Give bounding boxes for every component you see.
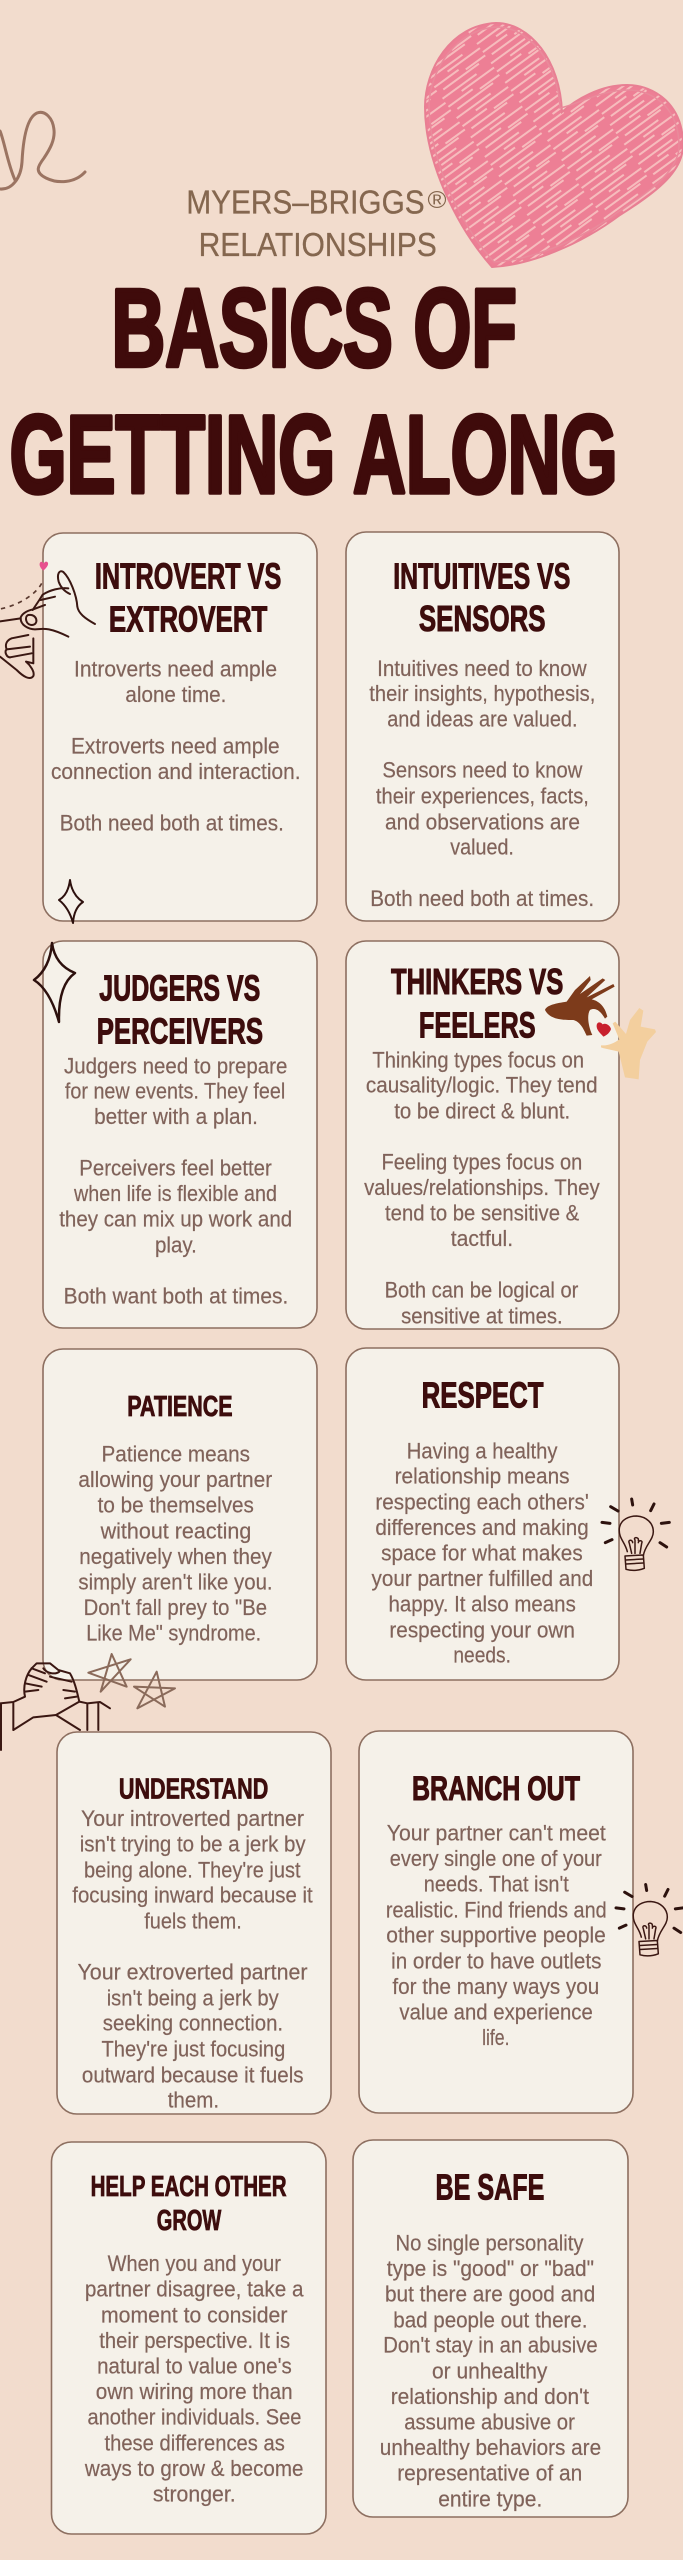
- heading: patience: PATIENCE: [127, 1391, 233, 1423]
- text: judgers vs perceivers body: they can mix up work and: [59, 1207, 292, 1232]
- text: help each other grow body: [84, 2251, 304, 2507]
- text: branch out body: [386, 1821, 607, 2050]
- text: patience body: [78, 1442, 273, 1646]
- text: thinkers vs feelers body: values/relationships. They: [364, 1175, 600, 1200]
- heading: thinkers vs feelers: [391, 961, 563, 1045]
- text: branch out body: in order to have outlets: [391, 1948, 602, 1973]
- text: intuitives vs sensors body: their insights, hypothesis,: [369, 681, 595, 706]
- text: be safe body: [380, 2231, 601, 2512]
- text: thinkers vs feelers body: Feeling types focus on: [382, 1149, 582, 1174]
- text: thinkers vs feelers body: to be direct & blunt.: [394, 1098, 570, 1123]
- text: judgers vs perceivers body: Perceivers feel better: [79, 1156, 272, 1181]
- icon: stars: [88, 1654, 175, 1708]
- text: thinkers vs feelers body: Both can be logical or: [385, 1277, 578, 1302]
- text: be safe body: entire type.: [438, 2487, 542, 2512]
- subtitle: [186, 183, 447, 263]
- text: understand body: being alone. They're just: [84, 1857, 300, 1882]
- text: intuitives vs sensors body: and observations are: [385, 809, 580, 834]
- text: help each other grow body: partner disagree, take a: [85, 2277, 304, 2302]
- subtitle: MYERS–BRIGGS: [186, 183, 425, 220]
- heading: introvert vs extrovert: [95, 555, 281, 640]
- text: respect body: happy. It also means: [388, 1592, 576, 1617]
- text: patience body: Patience means: [102, 1442, 250, 1467]
- text: be safe body: but there are good and: [385, 2282, 595, 2307]
- panel: understand: [57, 1732, 331, 2114]
- text: understand body: [72, 1806, 313, 2113]
- heading: intuitives vs sensors: SENSORS: [419, 598, 546, 639]
- text: introvert vs extrovert body: Both need both at times.: [60, 811, 284, 836]
- heading: help each other grow: GROW: [157, 2205, 222, 2237]
- text: judgers vs perceivers body: [59, 1053, 292, 1308]
- text: intuitives vs sensors body: Sensors need to know: [382, 758, 582, 783]
- icon: swirl line: [0, 112, 85, 189]
- icon: pinky promise hands: [0, 562, 95, 678]
- text: understand body: fuels them.: [144, 1908, 242, 1933]
- panel: patience: [43, 1349, 317, 1680]
- panel: thinkers vs feelers: [346, 941, 619, 1329]
- text: intuitives vs sensors body: [369, 656, 595, 911]
- text: respect body: Having a healthy: [407, 1438, 558, 1463]
- text: help each other grow body: natural to value one's: [97, 2354, 292, 2379]
- icon: lightbulb branch out: [616, 1884, 683, 1956]
- text: introvert vs extrovert body: Introverts need ample: [74, 657, 277, 682]
- text: help each other grow body: own wiring more than: [96, 2379, 293, 2404]
- text: be safe body: bad people out there.: [393, 2307, 588, 2332]
- text: judgers vs perceivers body: Judgers need to prepare: [64, 1053, 287, 1078]
- text: thinkers vs feelers body: Thinking types focus on: [372, 1047, 584, 1072]
- panel: intuitives vs sensors: [346, 532, 619, 921]
- heading: help each other grow: HELP EACH OTHER: [91, 2171, 287, 2203]
- text: introvert vs extrovert body: connection and interaction.: [51, 759, 300, 784]
- text: judgers vs perceivers body: play.: [155, 1232, 197, 1257]
- heading: respect: RESPECT: [422, 1375, 544, 1416]
- heading: intuitives vs sensors: INTUITIVES VS: [393, 555, 570, 596]
- text: patience body: allowing your partner: [78, 1467, 272, 1492]
- heading: thinkers vs feelers: FEELERS: [419, 1004, 536, 1045]
- text: understand body: seeking connection.: [103, 2011, 283, 2036]
- heading: judgers vs perceivers: JUDGERS VS: [99, 968, 260, 1009]
- text: help each other grow body: their perspective. It is: [99, 2328, 290, 2353]
- text: judgers vs perceivers body: better with a plan.: [94, 1104, 258, 1129]
- text: patience body: Don't fall prey to "Be: [84, 1595, 267, 1620]
- heading: be safe: BE SAFE: [436, 2166, 544, 2207]
- text: intuitives vs sensors body: and ideas are valued.: [387, 707, 578, 732]
- text: intuitives vs sensors body: Intuitives need to know: [377, 656, 587, 681]
- panel: respect: [346, 1348, 619, 1680]
- text: understand body: them.: [168, 2088, 219, 2113]
- text: patience body: without reacting: [100, 1518, 251, 1543]
- text: thinkers vs feelers body: sensitive at times.: [401, 1303, 563, 1328]
- icon: sparkle large: [34, 943, 75, 1022]
- text: help each other grow body: these differences as: [104, 2430, 285, 2455]
- text: understand body: Your introverted partner: [81, 1806, 304, 1831]
- heading: thinkers vs feelers: THINKERS VS: [391, 961, 563, 1002]
- text: help each other grow body: When you and your: [108, 2251, 281, 2276]
- text: respect body: needs.: [453, 1643, 511, 1668]
- text: help each other grow body: ways to grow & become: [84, 2456, 304, 2481]
- text: be safe body: No single personality: [396, 2231, 584, 2256]
- panel: judgers vs perceivers: [43, 941, 317, 1328]
- text: respect body: space for what makes: [381, 1541, 583, 1566]
- heading: intuitives vs sensors: [393, 555, 570, 639]
- heading: understand: UNDERSTAND: [119, 1774, 268, 1806]
- text: intuitives vs sensors body: valued.: [450, 834, 514, 859]
- text: introvert vs extrovert body: Extroverts need ample: [71, 733, 280, 758]
- heading: judgers vs perceivers: PERCEIVERS: [97, 1010, 263, 1051]
- text: patience body: to be themselves: [98, 1493, 254, 1518]
- text: respect body: respecting each others': [375, 1489, 589, 1514]
- text: branch out body: needs. That isn't: [424, 1872, 569, 1897]
- text: patience body: Like Me" syndrome.: [86, 1621, 261, 1646]
- text: be safe body: assume abusive or: [404, 2410, 575, 2435]
- heading: judgers vs perceivers: [97, 968, 263, 1051]
- heading: introvert vs extrovert: EXTROVERT: [109, 599, 267, 640]
- text: thinkers vs feelers body: tend to be sensitive &: [385, 1201, 579, 1226]
- heading: introvert vs extrovert: INTROVERT VS: [95, 555, 281, 596]
- text: help each other grow body: another individuals. See: [88, 2405, 301, 2430]
- panel: branch out: [359, 1731, 633, 2113]
- text: help each other grow body: stronger.: [153, 2482, 236, 2507]
- text: branch out body: for the many ways you: [392, 1974, 599, 1999]
- text: thinkers vs feelers body: tactful.: [451, 1226, 513, 1251]
- icon: scribbled heart: [425, 23, 683, 267]
- text: be safe body: or unhealthy: [432, 2358, 547, 2383]
- text: intuitives vs sensors body: their experiences, facts,: [376, 783, 589, 808]
- text: respect body: relationship means: [395, 1464, 570, 1489]
- icon: clasped hands: [0, 1663, 110, 1750]
- icon: hands holding heart: [545, 976, 656, 1079]
- text: understand body: outward because it fuels: [82, 2062, 304, 2087]
- text: respect body: [372, 1438, 593, 1668]
- text: respect body: differences and making: [375, 1515, 589, 1540]
- text: be safe body: unhealthy behaviors are: [380, 2435, 601, 2460]
- subtitle: ®: [428, 187, 447, 214]
- panel: introvert vs extrovert: [43, 533, 317, 921]
- title: [10, 267, 618, 517]
- text: understand body: isn't trying to be a jerk by: [80, 1832, 306, 1857]
- icon: sparkle small: [59, 880, 83, 923]
- text: judgers vs perceivers body: Both want both at times.: [64, 1283, 288, 1308]
- heading: branch out: BRANCH OUT: [412, 1770, 580, 1808]
- text: be safe body: Don't stay in an abusive: [383, 2333, 598, 2358]
- panel: be safe: [353, 2140, 628, 2517]
- text: introvert vs extrovert body: [51, 657, 300, 836]
- text: branch out body: life.: [482, 2025, 510, 2050]
- icon: lightbulb respect: [602, 1499, 669, 1570]
- subtitle: RELATIONSHIPS: [199, 226, 437, 263]
- text: understand body: They're just focusing: [102, 2037, 285, 2062]
- text: thinkers vs feelers body: [364, 1047, 600, 1328]
- text: judgers vs perceivers body: when life is flexible and: [73, 1181, 277, 1206]
- text: understand body: Your extroverted partner: [78, 1960, 308, 1985]
- text: respect body: your partner fulfilled and: [372, 1566, 593, 1591]
- text: branch out body: every single one of your: [390, 1846, 602, 1871]
- text: patience body: negatively when they: [79, 1544, 272, 1569]
- text: patience body: simply aren't like you.: [78, 1570, 273, 1595]
- text: be safe body: representative of an: [397, 2461, 582, 2486]
- text: be safe body: type is "good" or "bad": [387, 2256, 594, 2281]
- panel: help each other grow: [52, 2142, 326, 2534]
- text: branch out body: value and experience: [399, 2000, 593, 2025]
- text: thinkers vs feelers body: causality/logic. They tend: [366, 1073, 598, 1098]
- text: intuitives vs sensors body: Both need both at times.: [370, 886, 594, 911]
- text: judgers vs perceivers body: for new events. They feel: [65, 1079, 285, 1104]
- text: respect body: respecting your own: [389, 1617, 575, 1642]
- heading: help each other grow: [91, 2171, 287, 2237]
- text: branch out body: other supportive people: [386, 1923, 606, 1948]
- text: understand body: isn't being a jerk by: [107, 1985, 279, 2010]
- text: introvert vs extrovert body: alone time.: [125, 682, 226, 707]
- text: branch out body: realistic. Find friends and: [386, 1897, 607, 1922]
- text: understand body: focusing inward because it: [72, 1883, 313, 1908]
- text: help each other grow body: moment to consider: [101, 2302, 287, 2327]
- text: be safe body: relationship and don't: [391, 2384, 589, 2409]
- text: branch out body: Your partner can't meet: [387, 1821, 606, 1846]
